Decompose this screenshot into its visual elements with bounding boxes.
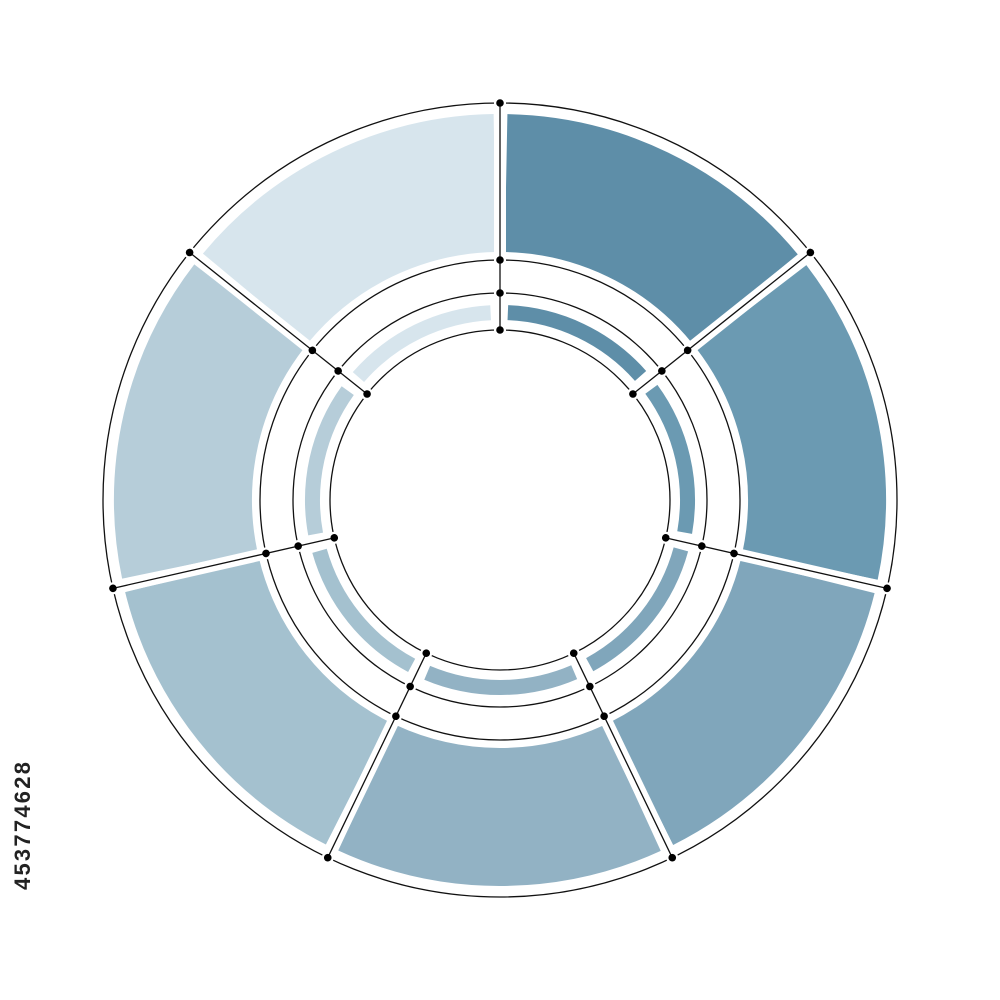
outer segments	[54, 54, 946, 946]
ring outlines	[103, 103, 897, 897]
stock id text: 453774628	[10, 762, 35, 890]
inner bars	[235, 235, 765, 765]
dividers with dots	[108, 99, 892, 864]
